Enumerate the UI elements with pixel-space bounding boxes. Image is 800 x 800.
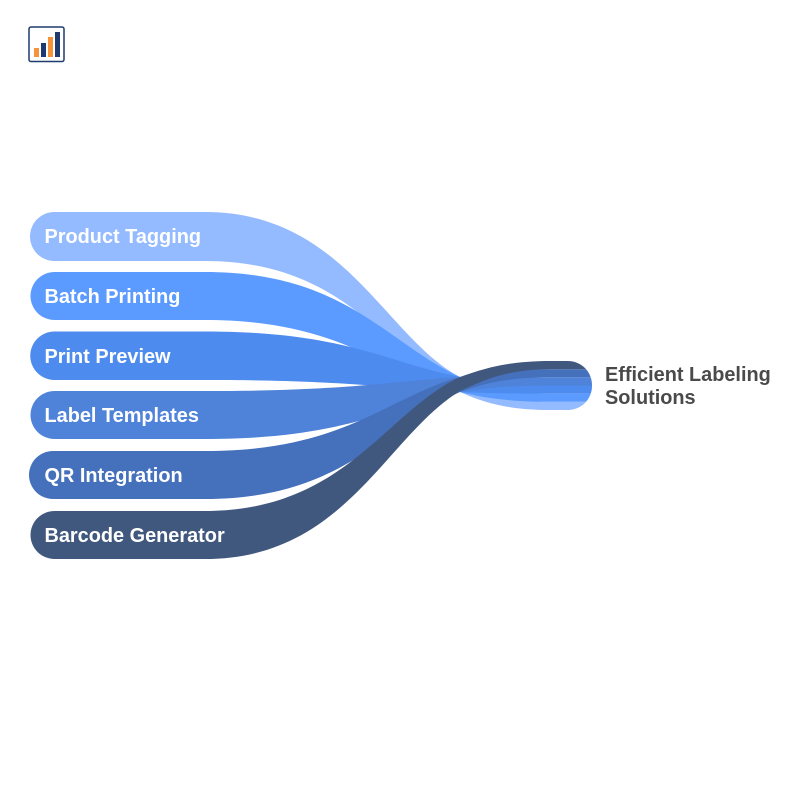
band: Label Templates [31, 377, 600, 439]
band: Print Preview [30, 332, 600, 394]
band: Print Preview: Print Preview [44, 346, 171, 368]
outcome label: Efficient Labeling [605, 364, 771, 386]
band: Batch Printing: Batch Printing [44, 286, 180, 308]
band: Barcode Generator [31, 361, 600, 559]
band: QR Integration [29, 369, 600, 499]
band: Product Tagging: Product Tagging [44, 226, 201, 248]
outcome label: Solutions [605, 387, 696, 409]
flow diagram: six labelled bands converging into one [29, 212, 600, 559]
band: QR Integration: QR Integration [44, 465, 183, 487]
band: Label Templates: Label Templates [44, 405, 199, 427]
band: Batch Printing [31, 272, 600, 402]
icon: bar chart logo [29, 27, 64, 62]
band: Product Tagging [30, 212, 600, 410]
band: Barcode Generator: Barcode Generator [44, 525, 225, 547]
